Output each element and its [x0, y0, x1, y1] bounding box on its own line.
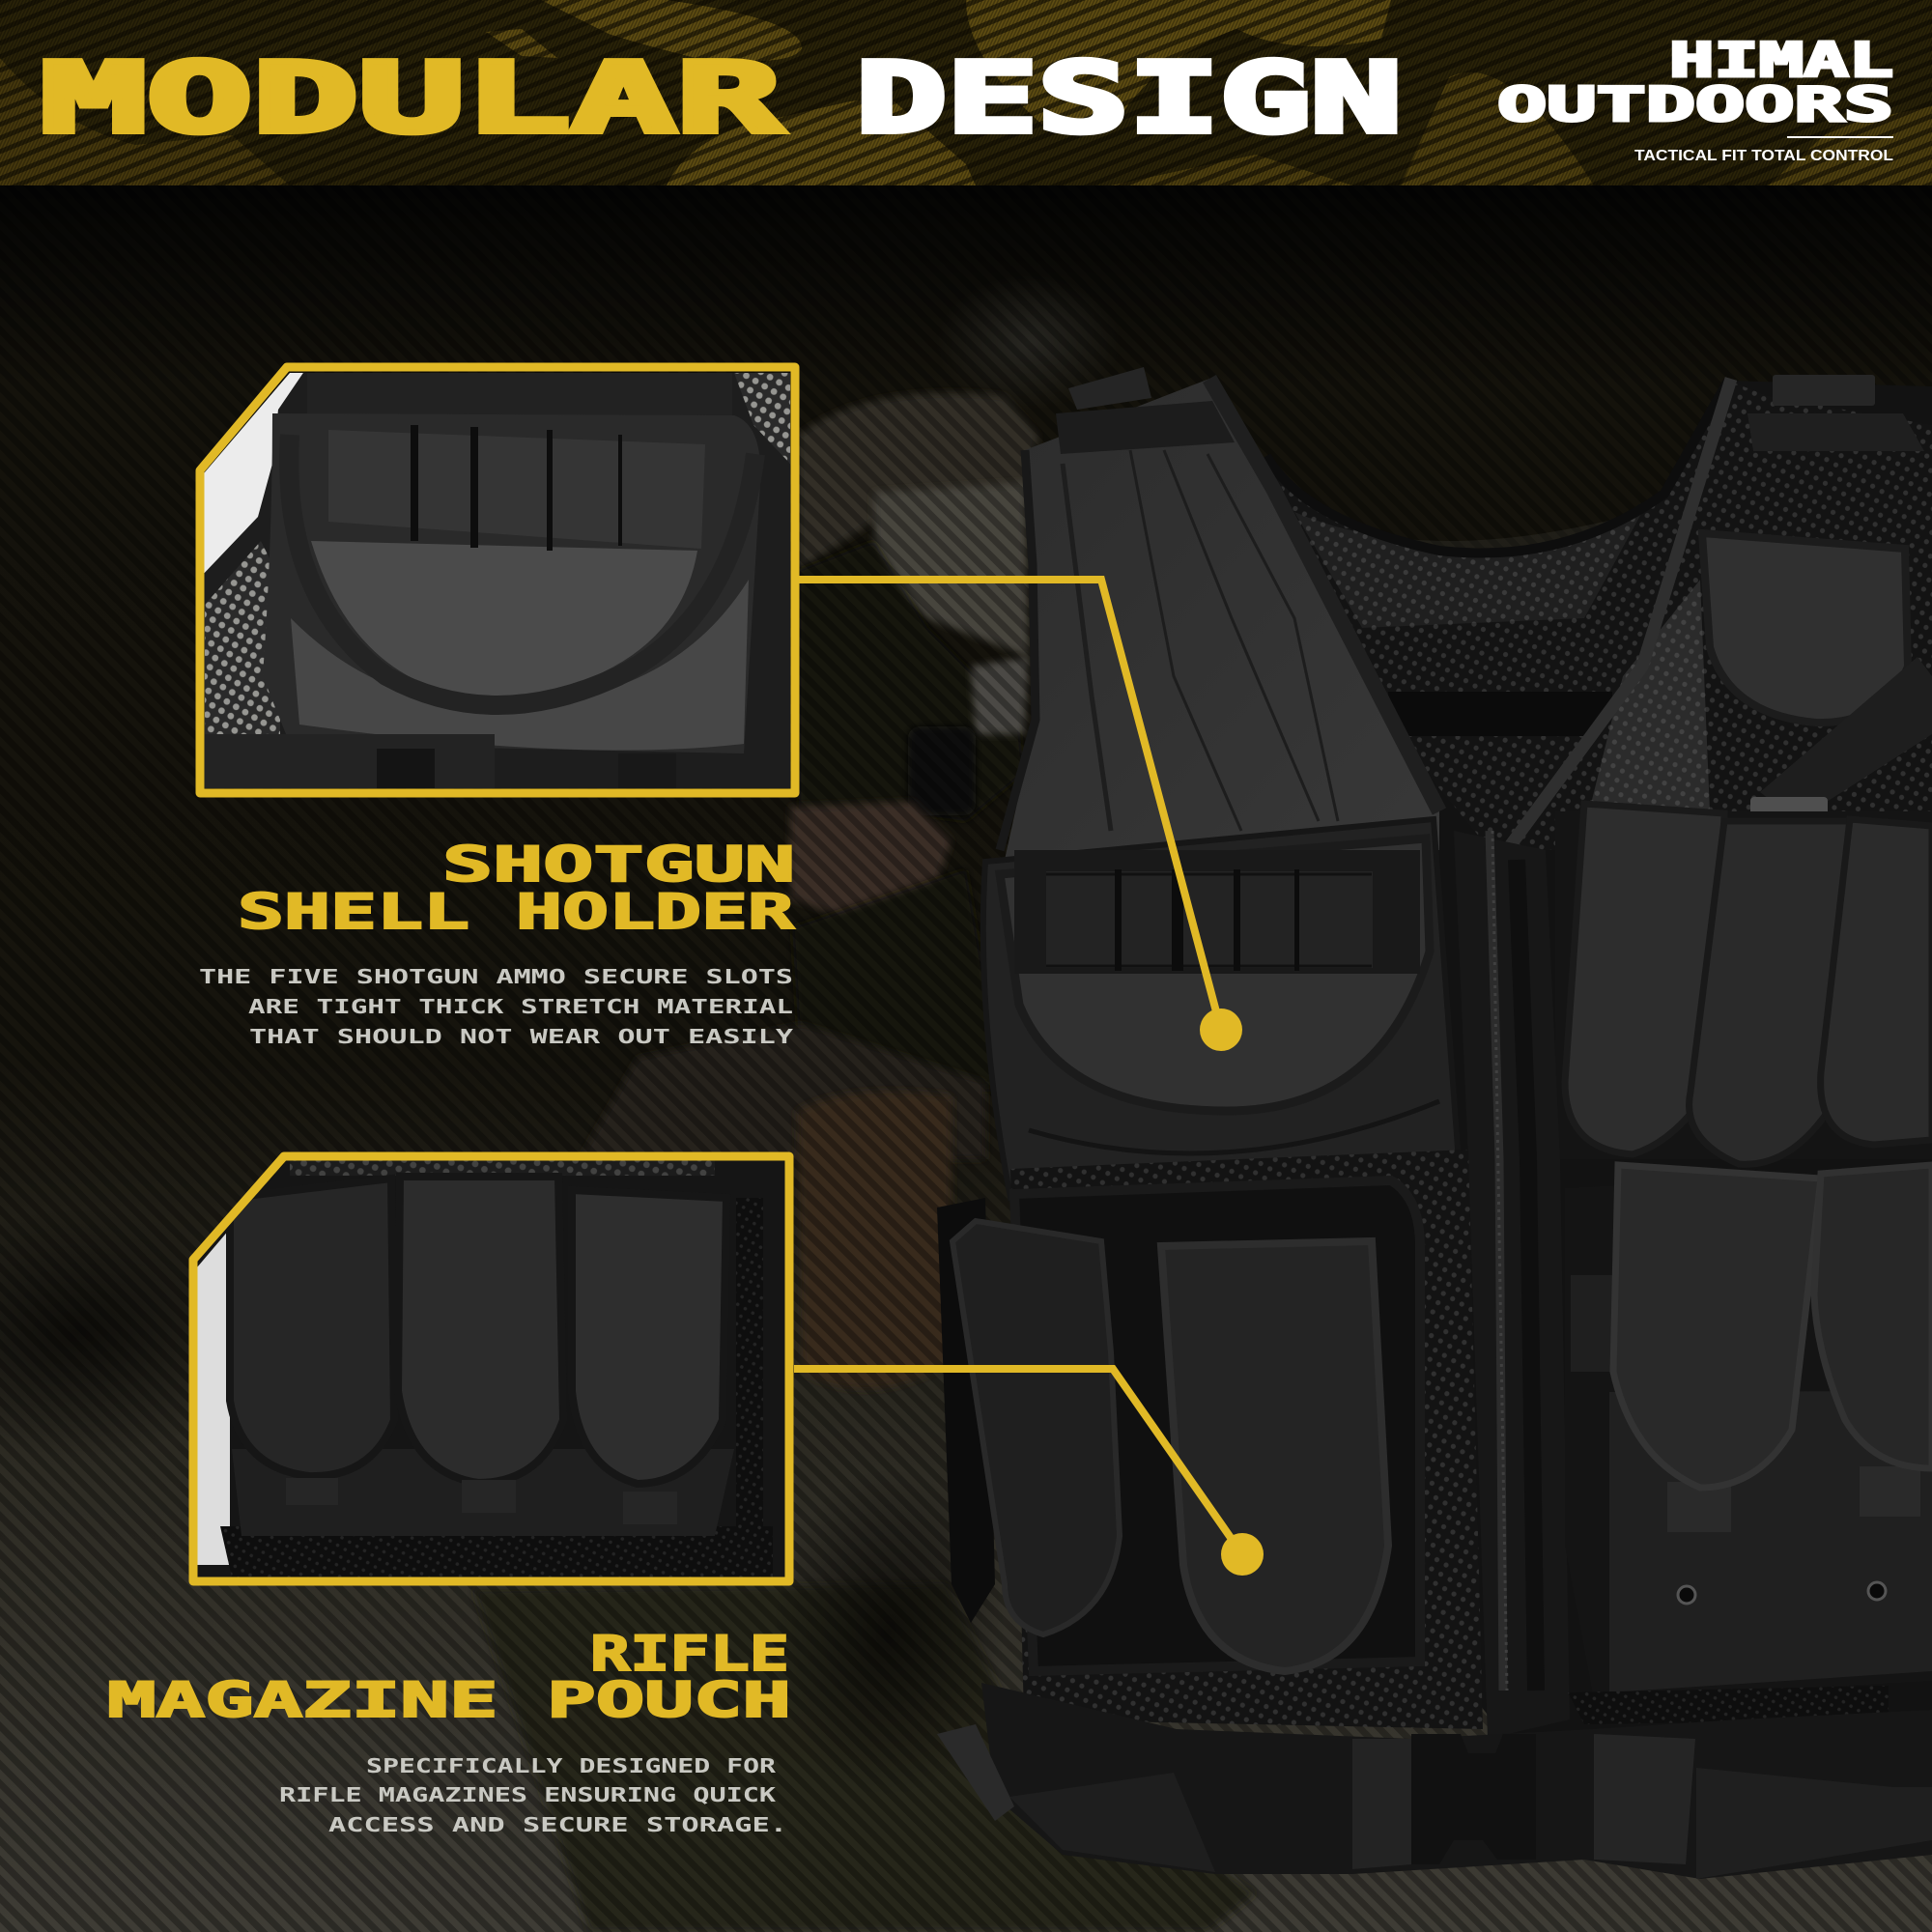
right chest mesh panel — [1507, 379, 1932, 850]
connector: shotgun shell holder — [799, 580, 1242, 1051]
heading: rifle magazine pouch: MAGAZINE POUCH — [107, 1672, 791, 1728]
panel: shotgun shell holder close-up — [195, 363, 804, 798]
text: rifle magazine pouch description: SPECIFICALLY DESIGNED FOR — [366, 1754, 777, 1777]
brand logo: TACTICAL FIT TOTAL CONTROL — [1634, 148, 1893, 164]
left shoulder strap — [1056, 367, 1235, 454]
brand logo: OUTDOORS — [1497, 77, 1893, 132]
text: shotgun shell holder description — [199, 965, 793, 1048]
upper magazine pouches — [1555, 804, 1932, 1164]
panel frame — [193, 1156, 789, 1581]
lower right pouch panel — [1565, 1169, 1932, 1724]
lower left pouch frame — [937, 1180, 1420, 1671]
panel frame — [200, 367, 795, 793]
belt — [937, 1683, 1932, 1879]
text: rifle magazine pouch description: RIFLE MAGAZINES ENSURING QUICK — [279, 1783, 776, 1806]
close-up photo — [188, 1151, 797, 1586]
zipper — [1454, 831, 1570, 1739]
vest back lining — [1256, 381, 1932, 1739]
text: rifle magazine pouch description — [279, 1754, 787, 1836]
text: shotgun shell holder description: THE FIVE SHOTGUN AMMO SECURE SLOTS — [199, 965, 793, 988]
text: rifle magazine pouch description: ACCESS AND SECURE STORAGE. — [328, 1813, 787, 1836]
heading: shotgun shell holder: SHELL HOLDER — [238, 884, 795, 940]
title: DESIGN — [856, 42, 1402, 155]
heading: rifle magazine pouch — [107, 1626, 791, 1728]
lower left magazine flap A — [952, 1221, 1120, 1634]
header band — [0, 0, 1932, 185]
left shoulder front panel — [1000, 379, 1439, 860]
title: MODULAR — [41, 42, 783, 155]
lower left mesh — [1010, 1150, 1483, 1729]
text: shotgun shell holder description: ARE TIGHT THICK STRETCH MATERIAL — [248, 995, 793, 1018]
panel: rifle magazine pouch close-up — [188, 1151, 797, 1586]
right shoulder strap — [1747, 375, 1924, 451]
shotgun pouch — [983, 819, 1459, 1198]
brand logo: HIMAL — [1669, 33, 1893, 88]
close-up photo — [195, 363, 804, 798]
camouflage pattern — [0, 0, 1932, 185]
belt buckle — [1411, 1734, 1536, 1864]
heading: shotgun shell holder — [238, 837, 795, 940]
lower left magazine flap B — [1161, 1241, 1388, 1671]
radio pouch with flap — [1702, 533, 1932, 826]
vest photo — [937, 367, 1932, 1879]
brand logo — [1497, 33, 1893, 164]
lower right magazine flaps — [1613, 1165, 1932, 1488]
title — [41, 42, 1402, 155]
heading: rifle magazine pouch: RIFLE — [590, 1626, 789, 1682]
neck mesh — [1266, 381, 1728, 850]
text: shotgun shell holder description: THAT SHOULD NOT WEAR OUT EASILY — [249, 1025, 793, 1048]
heading: shotgun shell holder: SHOTGUN — [442, 837, 795, 893]
connector: rifle magazine pouch — [794, 1369, 1264, 1576]
